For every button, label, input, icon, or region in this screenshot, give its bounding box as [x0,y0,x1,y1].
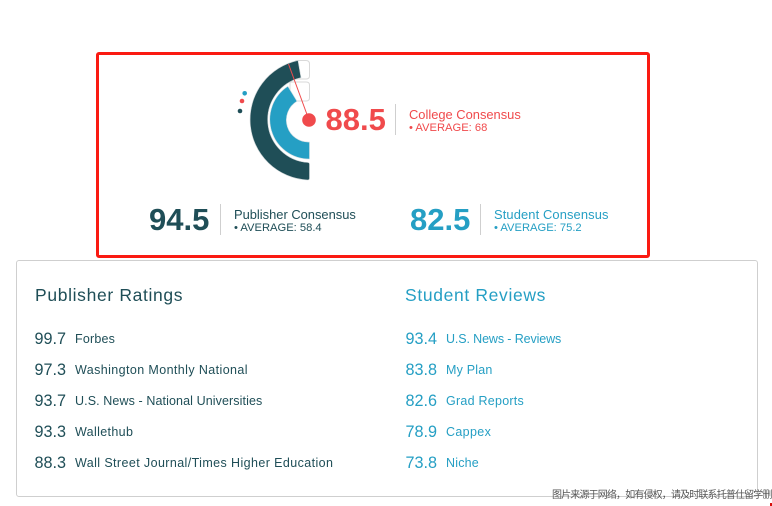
student reviews list: Grad Reports [446,394,524,408]
publisher ratings list: 97.3 [34,361,66,379]
student reviews list: 93.4 [405,330,437,348]
needle [288,64,309,120]
publisher consensus label: Publisher Consensus [234,206,356,222]
student reviews list: My Plan [446,363,493,377]
publisher ratings list: 93.7 [34,392,66,410]
student consensus label: Student Consensus [494,206,609,222]
publisher ratings list: 88.3 [34,454,66,472]
publisher ratings list: 99.7 [34,330,66,348]
publisher ratings list: Wallethub [75,425,133,439]
legend dots [238,91,247,113]
student reviews list [405,330,561,472]
publisher ratings list: Wall Street Journal/Times Higher Education [75,456,333,470]
radial gauge chart [238,60,316,180]
student reviews list: 82.6 [405,392,437,410]
publisher ratings list [34,330,333,472]
student consensus score: 82.5 [410,202,470,237]
student reviews list: Niche [446,456,479,470]
student reviews list: Cappex [446,425,491,439]
publisher ratings heading: Publisher Ratings [35,285,183,305]
corner mark [770,503,772,506]
publisher ratings list: Washington Monthly National [75,363,248,377]
publisher ratings list: 93.3 [34,423,66,441]
student reviews list: U.S. News - Reviews [446,332,561,346]
gauge tracks [290,60,310,101]
college consensus average: • AVERAGE: 68 [409,122,487,134]
student reviews list: 78.9 [405,423,437,441]
inner ring: student consensus [270,86,310,159]
needle hub [302,113,316,127]
student reviews heading: Student Reviews [405,285,546,305]
publisher consensus average: • AVERAGE: 58.4 [234,222,322,234]
college consensus score: 88.5 [326,102,386,137]
highlighted consensus panel [96,52,650,258]
outer ring: publisher consensus [250,60,310,180]
college consensus label: College Consensus [409,106,521,122]
student consensus average: • AVERAGE: 75.2 [494,222,582,234]
ratings card [16,260,758,497]
student reviews list: 73.8 [405,454,437,472]
publisher ratings list: Forbes [75,332,115,346]
publisher consensus score: 94.5 [149,202,209,237]
publisher ratings list: U.S. News - National Universities [75,394,262,408]
student reviews list: 83.8 [405,361,437,379]
